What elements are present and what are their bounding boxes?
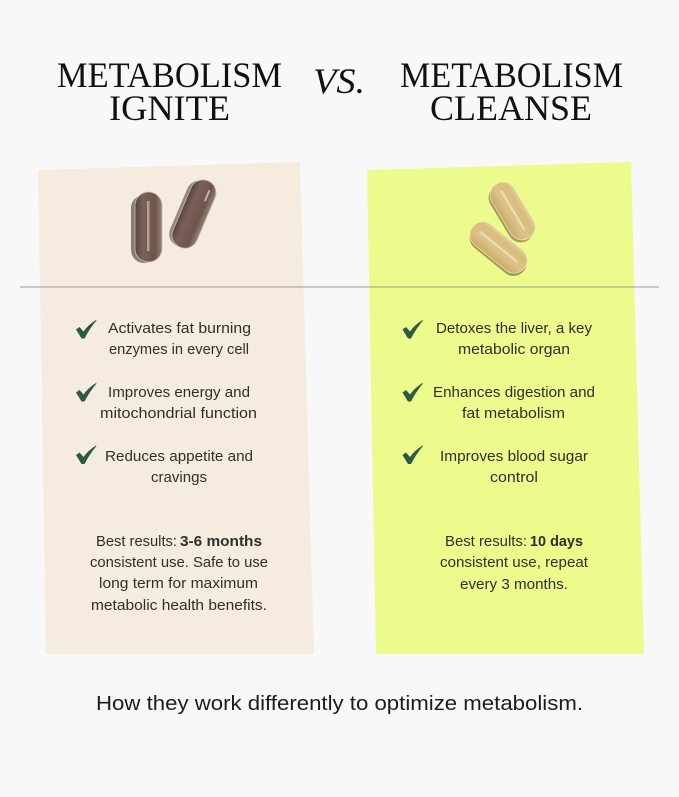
- best results: Ignite: 3-6 months: [180, 534, 262, 550]
- benefit: reduces appetite: Reduces appetite and: [105, 449, 253, 465]
- benefit: improves energy: Improves energy and: [108, 385, 250, 401]
- heading: Metabolism Cleanse: CLEANSE: [430, 88, 592, 128]
- heading: Metabolism Cleanse: [400, 55, 623, 128]
- best results: Cleanse: 10 days: [530, 534, 583, 550]
- benefit: reduces appetite: cravings: [151, 470, 207, 486]
- benefit: enhances digestion: fat metabolism: [462, 406, 565, 422]
- icon: yellow capsules: [463, 177, 541, 281]
- panel: Metabolism Ignite background: [38, 162, 314, 654]
- benefit: improves energy: mitochondrial function: [100, 406, 257, 422]
- panel: Metabolism Cleanse background: [367, 162, 644, 654]
- footer caption: How they work differently to optimize metabolism.: [96, 692, 583, 715]
- benefit: activates fat burning: Activates fat burning: [108, 321, 251, 337]
- best results: Cleanse: every 3 months.: [460, 577, 568, 593]
- best results: Ignite: [90, 534, 268, 614]
- benefit: enhances digestion: Enhances digestion and: [433, 385, 595, 401]
- benefit: detoxes the liver: [402, 320, 593, 358]
- benefit: activates fat burning: enzymes in every cell: [109, 342, 249, 358]
- benefit: reduces appetite: [76, 446, 253, 486]
- benefit: activates fat burning: [76, 320, 251, 358]
- heading: Metabolism Cleanse: METABOLISM: [400, 55, 623, 95]
- benefit: detoxes the liver: Detoxes the liver, a key: [436, 321, 593, 337]
- heading: vs.: VS.: [313, 61, 365, 101]
- best results: Cleanse: [440, 534, 588, 593]
- benefit: improves blood sugar: [402, 446, 588, 486]
- benefit: improves blood sugar: Improves blood sugar: [440, 449, 588, 465]
- best results: Ignite: long term for maximum: [99, 576, 258, 592]
- benefit: enhances digestion: [402, 383, 595, 422]
- benefit: detoxes the liver: metabolic organ: [458, 342, 570, 358]
- divider line: [20, 286, 659, 288]
- best results: Ignite: metabolic health benefits.: [91, 598, 267, 614]
- benefit: improves blood sugar: control: [490, 470, 538, 486]
- heading: Metabolism Ignite: [57, 55, 282, 128]
- best results: Cleanse: consistent use, repeat: [440, 555, 588, 571]
- benefit: improves energy: [76, 383, 257, 422]
- heading: Metabolism Ignite: METABOLISM: [57, 55, 282, 95]
- best results: Ignite: Best results:: [96, 534, 177, 550]
- icon: brown capsules: [131, 175, 220, 263]
- best results: Ignite: consistent use. Safe to use: [90, 555, 268, 571]
- heading: Metabolism Ignite: IGNITE: [109, 88, 230, 128]
- best results: Cleanse: Best results:: [445, 534, 527, 550]
